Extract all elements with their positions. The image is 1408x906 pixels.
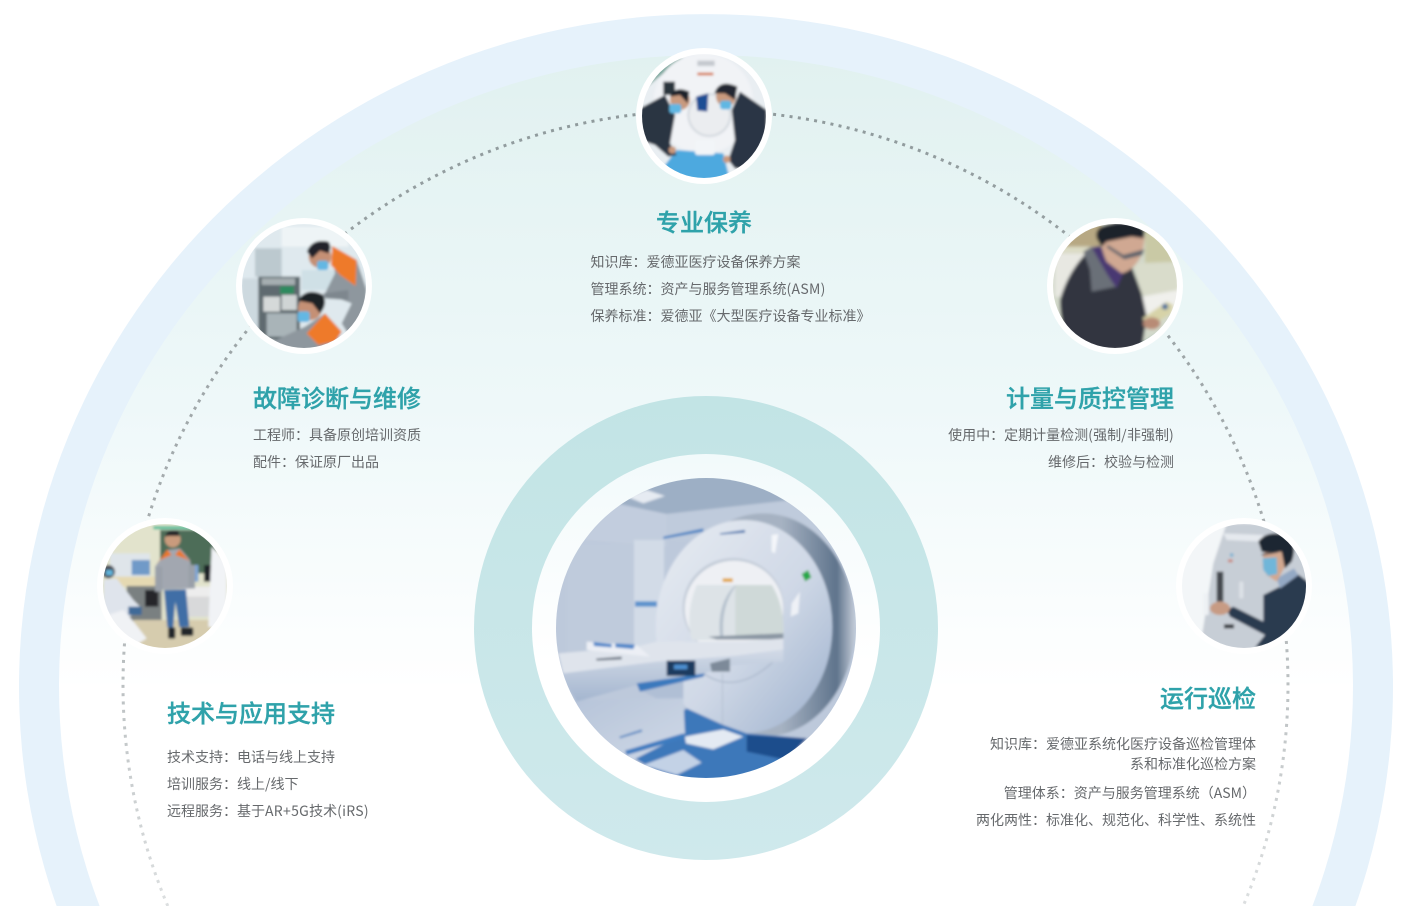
section: 专业保养 bbox=[590, 203, 870, 326]
text: remote service: 远程服务：基于AR+5G技术(iRS) bbox=[167, 801, 369, 821]
dotted orbit bbox=[123, 110, 1288, 906]
section: 故障诊断与维修 bbox=[253, 379, 421, 472]
left photo circle: two engineers repairing equipment bbox=[236, 218, 372, 354]
section: 运行巡检 bbox=[976, 679, 1256, 830]
top photo circle: two engineers at CT scanner bbox=[636, 48, 772, 184]
far-left photo circle: technician in training room bbox=[103, 518, 227, 648]
text: management system: 管理体系：资产与服务管理系统（ASM） bbox=[1004, 783, 1256, 803]
text: knowledge base bbox=[990, 734, 1256, 774]
text: after repair: 维修后：校验与检测 bbox=[1048, 452, 1174, 472]
text: parts: 配件：保证原厂出品 bbox=[253, 452, 379, 472]
text: technical support: 技术支持：电话与线上支持 bbox=[167, 747, 335, 767]
heading: 故障诊断与维修 bbox=[253, 379, 421, 414]
text: knowledge base: 知识库：爱德亚系统化医疗设备巡检管理体 bbox=[990, 734, 1256, 754]
centre teal ring bbox=[474, 396, 938, 860]
text: in use: 使用中：定期计量检测(强制/非强制) bbox=[948, 425, 1174, 445]
text: management system: 管理系统：资产与服务管理系统(ASM) bbox=[590, 279, 826, 299]
heading: 技术与应用支持 bbox=[167, 694, 335, 729]
text: maintenance standard: 保养标准：爱德亚《大型医疗设备专业标准》 bbox=[590, 306, 870, 326]
text: engineers: 工程师：具备原创培训资质 bbox=[253, 425, 421, 445]
section: 技术与应用支持 bbox=[167, 694, 369, 821]
right photo circle: engineer checking device bbox=[1047, 218, 1183, 354]
text: two-ization: 两化两性：标准化、规范化、科学性、系统性 bbox=[976, 810, 1256, 830]
text: knowledge base: 知识库：爱德亚医疗设备保养方案 bbox=[590, 252, 800, 272]
heading: 计量与质控管理 bbox=[1006, 379, 1174, 414]
heading: 运行巡检 bbox=[1160, 679, 1256, 714]
far-right photo circle: engineer operating cabinet bbox=[1185, 518, 1306, 648]
centre photo: MRI scanner bbox=[553, 475, 860, 780]
centre white circle bbox=[532, 454, 880, 802]
heading: 专业保养 bbox=[656, 203, 752, 238]
section: 计量与质控管理 bbox=[948, 379, 1174, 472]
text: training: 培训服务：线上/线下 bbox=[167, 774, 298, 794]
text: knowledge base: 系和标准化巡检方案 bbox=[1130, 754, 1256, 774]
